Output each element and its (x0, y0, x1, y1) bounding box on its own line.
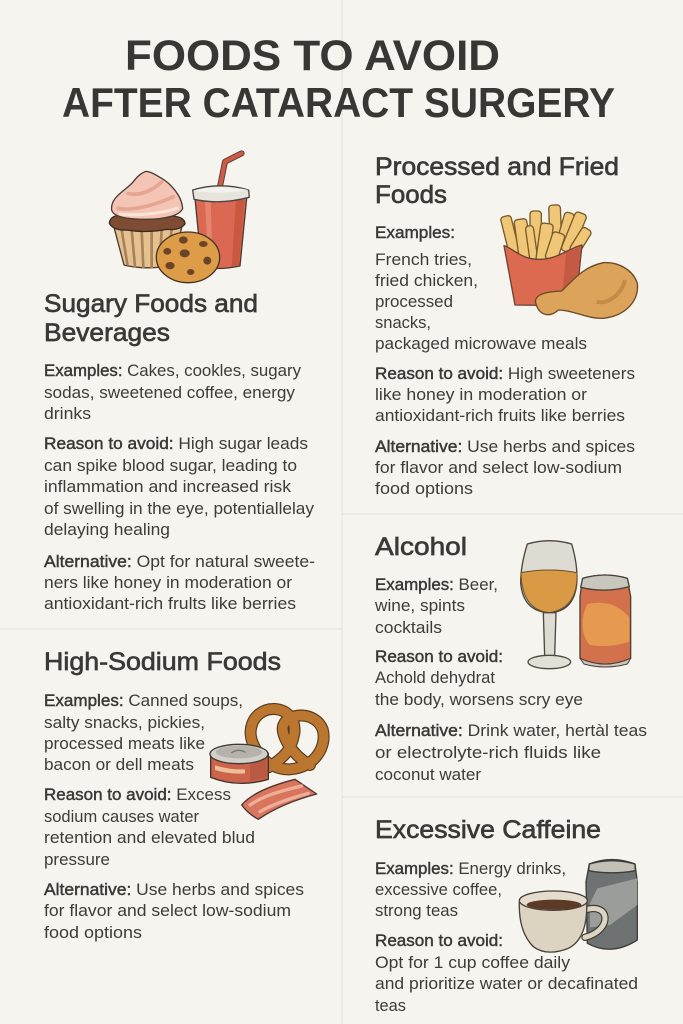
icon: coffee cup and energy drink can (519, 859, 637, 952)
text: caffeine examples: Examples: Energy drinks, (375, 859, 566, 878)
text: sugary examples: sodas, sweetened coffee, energy (44, 383, 296, 402)
icon: pretzel, canned food and bacon (210, 709, 324, 819)
text: processed alternative: food options (375, 479, 473, 498)
title: FOODS TO AVOID (125, 32, 500, 80)
panel: alcohol (374, 533, 647, 784)
text: alcohol reason: Achold dehydrat (375, 668, 495, 687)
text: processed examples: fried chicken, (375, 271, 478, 290)
text: sugary examples (44, 361, 302, 423)
text: caffeine examples: strong teas (375, 901, 458, 920)
text: sugary reason (44, 434, 315, 539)
text: sugary reason: inflammation and increased risk (44, 477, 292, 496)
text: caffeine reason: Reason to avoid: (375, 931, 503, 950)
panel: sugary foods and beverages (44, 153, 315, 613)
text: processed examples: French tries, (375, 250, 472, 269)
text: sodium examples: Examples: Canned soups, (44, 691, 243, 710)
text: caffeine reason: and prioritize water or decafinated (375, 974, 638, 993)
text: caffeine examples: excessive coffee, (375, 880, 502, 899)
text: sodium examples: processed meats like (44, 734, 205, 753)
heading: sugary foods: Beverages (44, 319, 170, 347)
text: alcohol examples: Examples: Beer, (375, 575, 498, 594)
text: sugary examples: Examples: Cakes, cookles, sugary (44, 361, 302, 380)
text: processed alternative (375, 437, 635, 498)
text: processed reason: like honey in moderation or (375, 385, 587, 404)
panel: high-sodium foods (44, 648, 324, 942)
heading: processed and fried foods (375, 153, 619, 209)
text: processed examples: packaged microwave meals (375, 334, 587, 353)
text: alcohol alternative: Alternative: Drink water, hertàl teas (375, 721, 647, 740)
text: alcohol alternative (375, 721, 647, 784)
text: alcohol reason: Reason to avoid: (375, 647, 503, 666)
panel: processed and fried foods (375, 153, 638, 498)
text: processed examples: Examples: (375, 223, 455, 242)
text: alcohol alternative: coconut water (375, 765, 481, 784)
text: processed examples (375, 223, 587, 353)
text: sugary reason: can spike blood sugar, leading to (44, 456, 297, 475)
icon: wine glass and beer can (521, 541, 631, 669)
text: sugary reason: delaying healing (44, 520, 170, 539)
text: sodium alternative: food options (44, 923, 142, 942)
text: alcohol reason: the body, worsens scry eye (375, 690, 583, 709)
title: AFTER CATARACT SURGERY (62, 79, 615, 126)
text: sodium reason: pressure (44, 850, 110, 869)
text: caffeine reason: teas (375, 996, 406, 1015)
text: sugary alternative (44, 552, 315, 613)
heading: sugary foods: Sugary Foods and (44, 290, 258, 318)
icon: cupcake, cookie and soda cup (109, 153, 249, 283)
text: alcohol reason (375, 647, 583, 709)
text: processed reason (375, 364, 635, 425)
text: sodium alternative (44, 880, 304, 942)
text: alcohol examples (374, 575, 498, 637)
text: sodium reason: retention and elevated blud (44, 828, 255, 847)
text: caffeine examples (375, 859, 566, 920)
text: processed reason: Reason to avoid: High sweeteners (375, 364, 635, 383)
title (62, 32, 615, 126)
text: alcohol examples: wine, spints (374, 596, 465, 615)
icon: french fries and fried chicken (500, 205, 638, 318)
text: processed alternative: for flavor and select low-sodium (375, 458, 622, 477)
heading: sugary foods (44, 290, 258, 347)
heading: high-sodium foods: High-Sodium Foods (44, 648, 281, 676)
text: sodium examples: bacon or dell meats (44, 755, 194, 774)
text: sugary examples: drinks (44, 404, 91, 423)
text: caffeine reason: Opt for 1 cup coffee daily (375, 953, 571, 972)
text: sodium reason: sodium causes water (44, 807, 199, 826)
text: processed reason: antioxidant-rich fruits like berries (375, 406, 625, 425)
text: sugary alternative: ners like honey in moderation or (44, 573, 292, 592)
text: caffeine reason (375, 931, 638, 1015)
text: sugary alternative: antioxidant-rich frults like berries (44, 594, 296, 613)
heading: alcohol: Alcohol (375, 533, 467, 561)
text: sodium reason (44, 785, 255, 869)
panel: excessive caffeine (375, 816, 638, 1015)
text: sodium alternative: for flavor and select low-sodium (44, 901, 291, 920)
text: processed examples: processed (375, 292, 453, 311)
text: sugary reason: of swelling in the eye, potentiallelay (44, 499, 315, 518)
text: sodium reason: Reason to avoid: Excess (44, 785, 231, 804)
text: sodium alternative: Alternative: Use herbs and spices (44, 880, 304, 899)
heading: processed and fried foods: Processed and Fried (375, 153, 619, 181)
text: alcohol examples: cocktails (375, 618, 442, 637)
text: sodium examples: salty snacks, pickies, (44, 713, 205, 732)
heading: processed and fried foods: Foods (375, 181, 447, 209)
text: alcohol alternative: or electrolyte-rich fluids like (375, 743, 601, 762)
text: processed examples: snacks, (375, 313, 431, 332)
text: sodium examples (44, 691, 243, 774)
heading: excessive caffeine: Excessive Caffeine (375, 816, 601, 844)
text: processed alternative: Alternative: Use herbs and spices (375, 437, 635, 456)
text: sugary reason: Reason to avoid: High sugar leads (44, 434, 308, 453)
text: sugary alternative: Alternative: Opt for natural sweete- (44, 552, 315, 571)
